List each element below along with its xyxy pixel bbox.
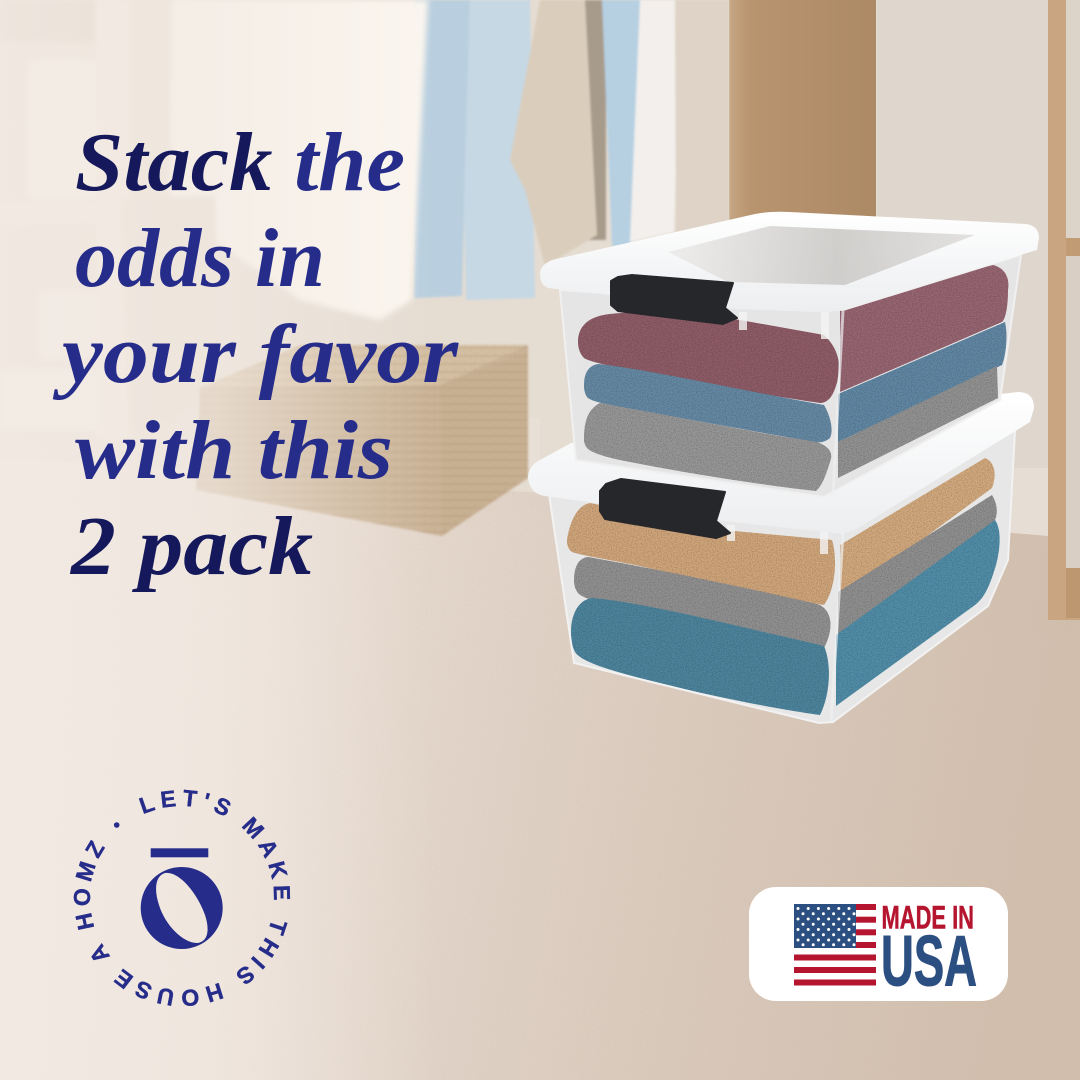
grey sweater [584,366,998,491]
left wall baseboard [410,418,540,468]
lower bin lid [528,392,1034,533]
upper bin body [560,255,1021,497]
right wall panel [877,0,1048,540]
tan sweater [567,458,995,605]
faded left closet backdrop [0,0,428,440]
upper storage bin [540,212,1039,497]
lower bin corner edge [831,533,843,722]
wicker basket [196,345,528,536]
upper bin handle [611,275,737,324]
headline [52,116,459,593]
headline line 1: Stack the [75,116,405,209]
upper bin plastic haze [560,255,1021,497]
blue sweater [584,322,1006,442]
headline line 4: with this [75,404,393,497]
logo separator dot [114,822,119,828]
maroon sweater [578,265,1008,403]
hanging clothes [414,0,729,300]
baseboard [1005,468,1048,540]
upper lid window [668,226,975,285]
headline line 3: your favor [52,308,459,401]
upper bin lid [540,212,1039,312]
upper bin corner edge [833,311,843,494]
headline line 2: odds in [75,212,325,305]
lower bin plastic haze [549,430,1015,723]
logo macron bar [151,848,208,857]
USA text: USA [881,923,977,1002]
carpet texture [0,450,1080,1080]
lower bin clips [727,525,828,554]
logo letter o [141,867,223,949]
made in text: MADE IN [882,899,974,935]
headline line 5: 2 pack [69,500,313,593]
circular brand logo [74,790,290,1006]
american flag [794,904,876,986]
floor carpet [0,458,1080,1080]
right wooden shelf [1048,0,1080,620]
upper bin clips [739,312,829,339]
badge background [749,887,1008,1001]
back wall [0,0,1080,560]
wood pillar [729,0,876,240]
circular slogan text: LET'S MAKE THIS HOUSE A HOMZ [74,790,290,1006]
lower storage bin [528,392,1034,723]
made in USA badge [749,887,1008,1002]
lower bin handle [600,479,730,538]
lower bin body [549,430,1015,723]
teal sweater [571,520,1000,715]
grey sweater [574,495,997,648]
